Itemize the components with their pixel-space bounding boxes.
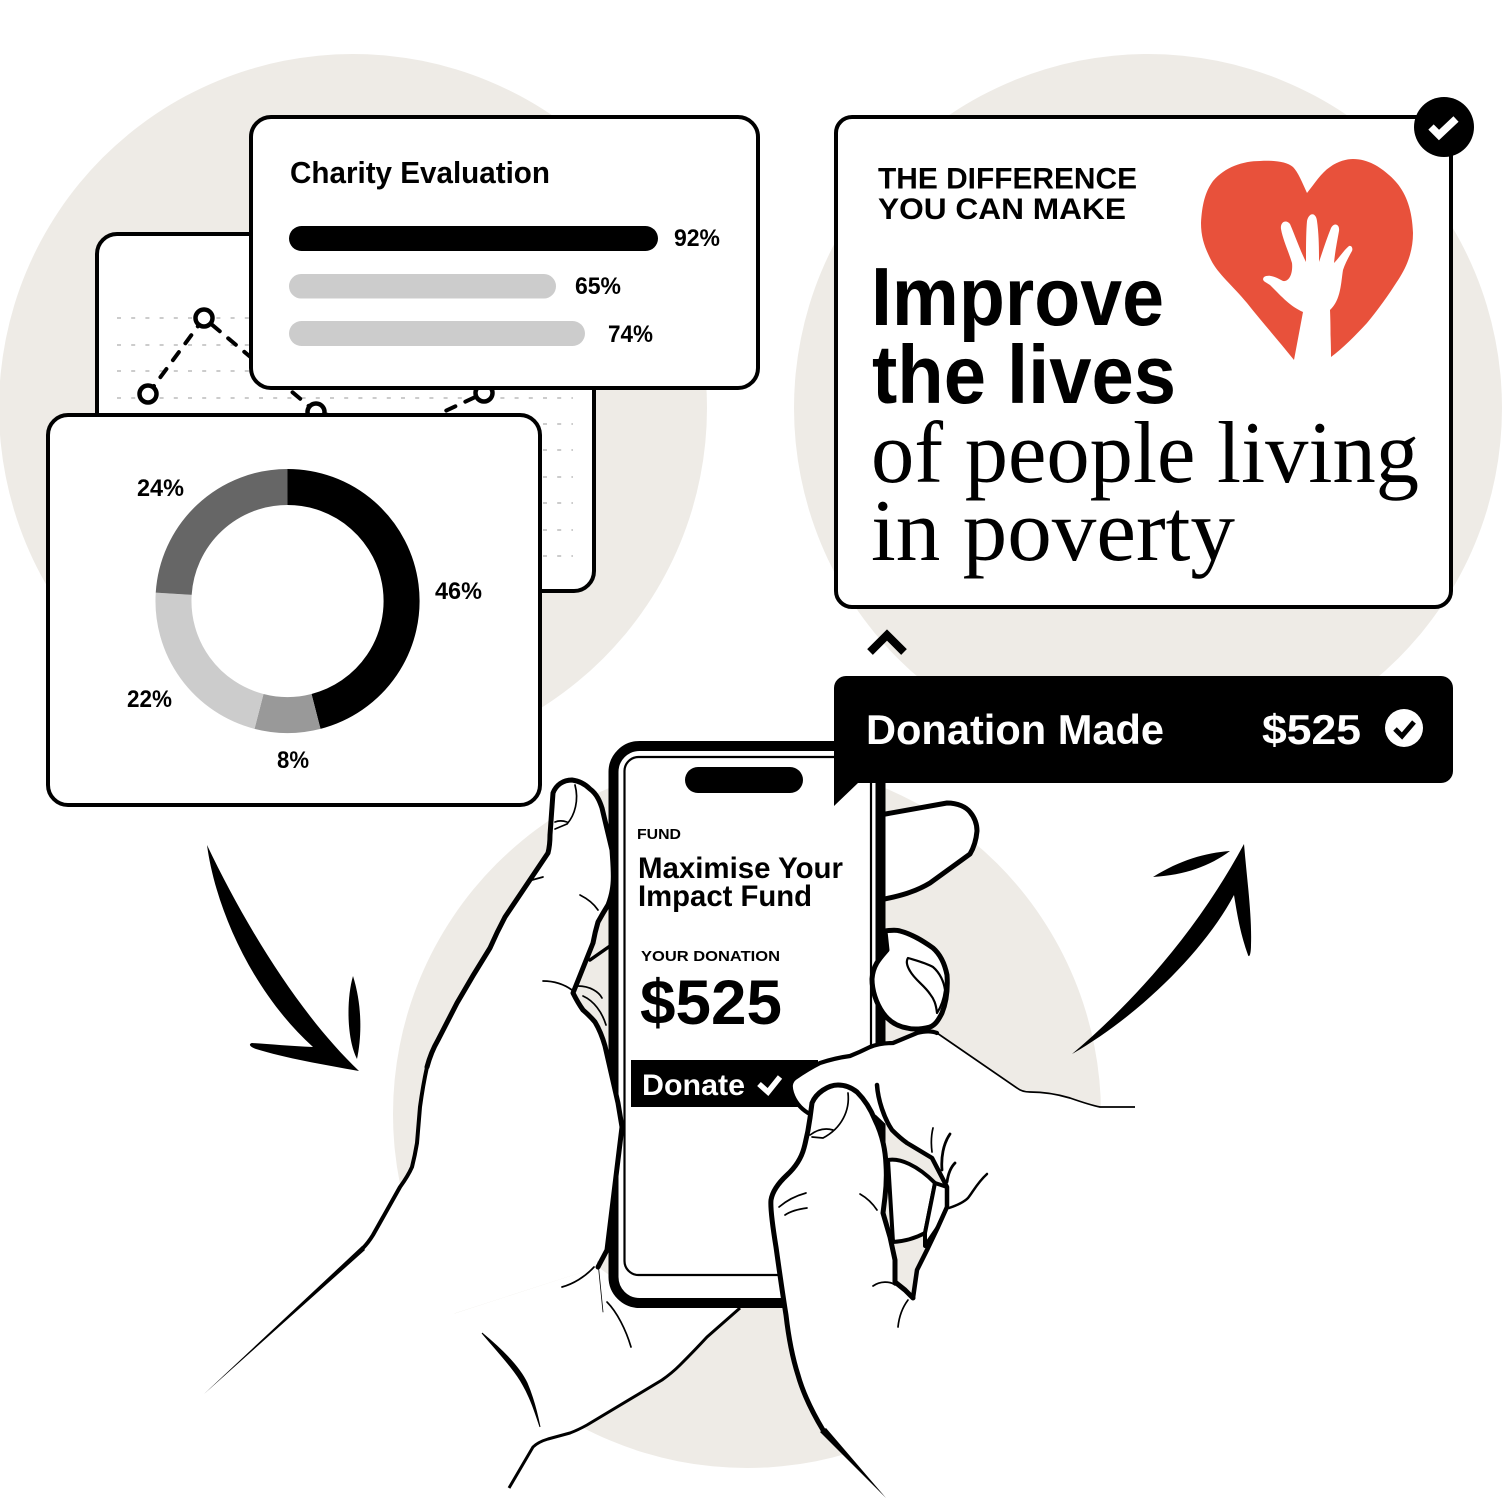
icon: heart with hand xyxy=(1201,159,1413,360)
tail of hand outline xyxy=(204,1246,365,1394)
thumbnail and creases xyxy=(779,1093,908,1327)
label: 46%: 46% xyxy=(435,578,482,605)
background circle: bottom xyxy=(393,760,1101,1468)
amount: $525: $525 xyxy=(640,968,782,1038)
lower finger on phone edge xyxy=(872,930,947,1029)
background circle: left xyxy=(0,54,707,762)
fund name: Maximise Your xyxy=(638,852,843,885)
palm crease xyxy=(482,1333,540,1427)
headline: of people living in poverty xyxy=(871,405,1419,580)
phone xyxy=(614,746,880,1303)
bar: 92%: 92% xyxy=(674,225,720,252)
thumb outline xyxy=(771,1085,913,1430)
panel: line chart card xyxy=(97,234,594,591)
right hand back and index finger xyxy=(791,1032,1135,1498)
bar: 65% xyxy=(289,273,621,300)
upper finger xyxy=(880,803,977,900)
strip finger xyxy=(925,1183,947,1246)
left hand thumb xyxy=(204,780,631,1394)
finger underside xyxy=(877,1085,947,1298)
tail of thumb outline xyxy=(820,1428,886,1498)
thumbnail and creases xyxy=(532,785,631,1347)
panel: charity evaluation xyxy=(251,117,758,388)
heading: charity evaluation: Charity Evaluation xyxy=(290,155,550,190)
label: your donation: YOUR DONATION xyxy=(641,948,780,965)
curled finger xyxy=(888,1160,935,1242)
hairs and creases xyxy=(931,1128,987,1208)
label: 22%: 22% xyxy=(127,686,172,713)
arrow: up to donation xyxy=(1072,844,1251,1054)
fund name xyxy=(638,852,843,913)
kicker: the difference you can make xyxy=(878,162,1137,226)
arrow: down to hand xyxy=(207,845,360,1071)
icon: up chevron xyxy=(870,635,904,652)
trend line points xyxy=(140,310,492,420)
right hand thumb xyxy=(771,1085,1000,1498)
left hand palm behind phone xyxy=(204,1267,740,1488)
donut ring xyxy=(173,487,402,715)
headline: of people living in poverty: of people living xyxy=(871,405,1419,502)
web of the hand xyxy=(590,946,610,960)
headline: improve the lives: Improve xyxy=(871,250,1164,343)
headline: improve the lives xyxy=(871,250,1176,421)
thumb outline upper xyxy=(427,780,622,1267)
headline: improve the lives: the lives xyxy=(872,328,1176,421)
wrist outline lower xyxy=(363,1067,427,1248)
bar: 74% xyxy=(289,321,653,348)
banner: donation made xyxy=(834,676,1453,806)
button: donate: Donate xyxy=(642,1069,745,1102)
hand outline to wrist xyxy=(937,1033,1135,1107)
dashed trend line xyxy=(148,318,484,432)
headline: of people living in poverty: in poverty xyxy=(871,483,1235,580)
background circle: right xyxy=(794,54,1502,762)
button: donate xyxy=(631,1060,818,1107)
kicker: the difference you can make: YOU CAN MAKE xyxy=(878,193,1126,226)
banner amount: $525 xyxy=(1262,706,1361,753)
icon: banner check xyxy=(1385,709,1423,747)
label: 24%: 24% xyxy=(137,475,184,502)
bar: 92% xyxy=(289,225,720,252)
panel: impact card xyxy=(836,97,1474,607)
bar: 65%: 65% xyxy=(575,273,621,300)
label: 8%: 8% xyxy=(277,747,309,774)
phone screen outline xyxy=(624,757,871,1275)
fingers behind phone xyxy=(880,803,977,900)
fingernail xyxy=(907,958,945,1013)
fund name: Impact Fund xyxy=(638,880,812,913)
icon: check badge xyxy=(1414,97,1474,157)
panel: donut chart xyxy=(48,415,540,805)
palm outline xyxy=(509,1308,740,1488)
banner label: Donation Made xyxy=(866,706,1164,753)
phone notch xyxy=(685,767,803,793)
kicker: the difference you can make: THE DIFFERENCE xyxy=(878,162,1137,196)
label: fund: FUND xyxy=(637,826,681,843)
bar: 74%: 74% xyxy=(608,321,653,348)
index finger outline xyxy=(791,1032,937,1113)
